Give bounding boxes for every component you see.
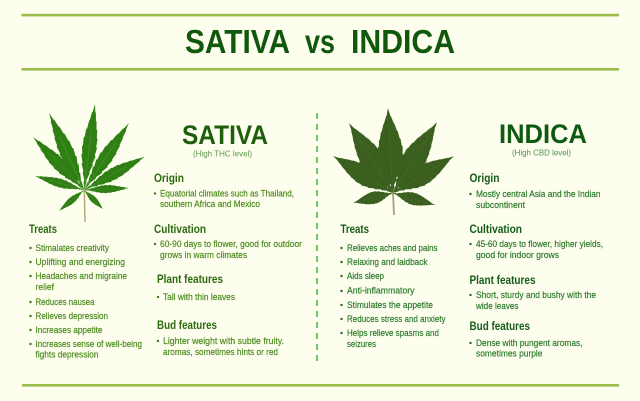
- cultivation block: grows in warm climates: [160, 250, 247, 260]
- indica subheading: (High CBD level): [512, 148, 571, 158]
- top rule: [22, 14, 619, 16]
- origin block: Equatorial climates such as Thailand,: [160, 188, 294, 198]
- plant features block: [469, 275, 596, 311]
- cultivation block: [469, 224, 603, 260]
- icon: indica leaf: [328, 107, 459, 215]
- treats list: Reduces nausea: [36, 297, 95, 307]
- bud features block: Lighter weight with subtle fruity.: [163, 336, 284, 346]
- panel: sativa: [29, 120, 302, 360]
- origin block: Origin: [470, 173, 500, 185]
- treats list: Increases sense of well-being: [36, 339, 142, 349]
- indica heading: INDICA: [499, 119, 587, 149]
- bud features block: Dense with pungent aromas,: [476, 338, 582, 348]
- bud features block: Bud features: [470, 321, 530, 333]
- cultivation block: Cultivation: [154, 224, 206, 236]
- panel: indica: [340, 119, 603, 358]
- origin block: [154, 173, 294, 209]
- cultivation block: good for indoor grows: [476, 250, 559, 260]
- origin block: subcontinent: [476, 200, 525, 210]
- bud features block: Bud features: [157, 320, 217, 332]
- title: [185, 24, 455, 61]
- sativa heading: SATIVA: [182, 120, 268, 150]
- origin block: [469, 173, 600, 210]
- treats list: Increases appetite: [36, 325, 102, 335]
- cultivation block: 45-60 days to flower, higher yields,: [476, 239, 603, 249]
- plant features block: wide leaves: [475, 301, 519, 311]
- treats list: fights depression: [36, 350, 98, 360]
- treats list: Stimulates the appetite: [347, 300, 433, 310]
- treats list: Reduces stress and anxiety: [347, 314, 446, 324]
- title: vs: [305, 24, 335, 61]
- cultivation block: Cultivation: [470, 224, 522, 236]
- treats list: Relieves aches and pains: [347, 243, 438, 253]
- treats list: Relaxing and laidback: [347, 257, 428, 267]
- bottom rule: [22, 384, 619, 387]
- title: INDICA: [351, 24, 455, 61]
- plant features block: [157, 274, 235, 302]
- treats list: Relieves depression: [36, 311, 108, 321]
- treats list: relief: [36, 282, 54, 292]
- treats list: Treats: [29, 224, 57, 236]
- origin block: Origin: [154, 173, 184, 185]
- plant features block: Tall with thin leaves: [163, 292, 235, 302]
- treats list: seizures: [347, 339, 376, 349]
- sativa subheading: (High THC level): [193, 150, 252, 158]
- treats list: [29, 224, 142, 360]
- treats list: Aids sleep: [347, 271, 384, 281]
- treats list: Stimalates creativity: [36, 243, 109, 253]
- treats list: [340, 224, 446, 349]
- icon: sativa leaf: [28, 103, 148, 222]
- cultivation block: 60-90 days to flower, good for outdoor: [160, 239, 302, 249]
- origin block: southern Africa and Mexico: [160, 199, 260, 209]
- treats list: Helps relieve spasms and: [347, 328, 439, 338]
- center dashed divider: [316, 113, 318, 364]
- bud features block: [157, 320, 284, 357]
- bud features block: aromas, sometimes hints or red: [163, 347, 278, 357]
- header rule: [22, 68, 619, 71]
- title: SATIVA: [185, 24, 290, 61]
- treats list: Treats: [340, 224, 369, 236]
- bud features block: sometimes purple: [476, 348, 542, 358]
- plant features block: Plant features: [470, 275, 536, 287]
- plant features block: Short, sturdy and bushy with the: [476, 290, 596, 300]
- treats list: Headaches and migraine: [36, 271, 127, 281]
- cultivation block: [154, 224, 302, 260]
- origin block: Mostly central Asia and the Indian: [476, 189, 600, 199]
- treats list: Uplifting and energizing: [36, 257, 125, 267]
- treats list: Anti-inflammatory: [347, 286, 415, 296]
- bud features block: [469, 321, 582, 358]
- plant features block: Plant features: [157, 274, 223, 286]
